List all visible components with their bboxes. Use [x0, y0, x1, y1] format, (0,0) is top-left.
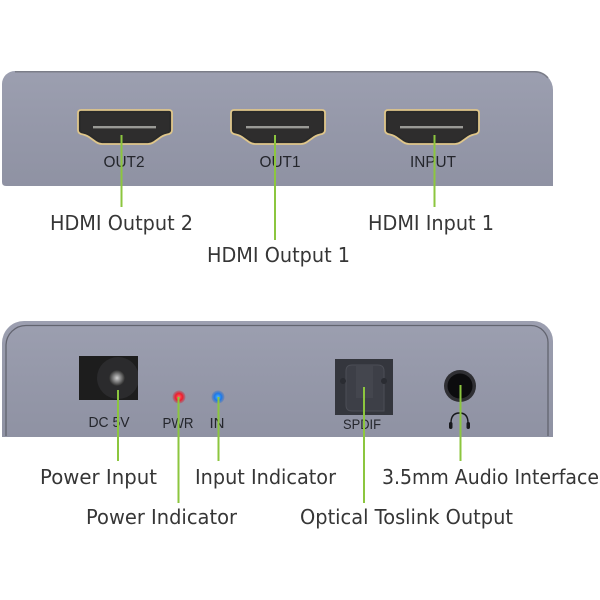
- text: OUT1: OUT1: [260, 154, 301, 171]
- icon: OUT2 HDMI port: [78, 110, 172, 144]
- text: SPDIF: SPDIF: [343, 416, 381, 432]
- label: HDMI Output 2: HDMI Output 2: [50, 211, 193, 235]
- label: Power Input: Power Input: [40, 465, 157, 489]
- icon: INPUT HDMI port: [385, 110, 479, 144]
- callout line: Optical Toslink Output: [363, 387, 365, 503]
- callout line: Input Indicator: [218, 397, 220, 461]
- text: DC 5V: DC 5V: [88, 414, 130, 431]
- callout line: Power Input: [117, 390, 119, 461]
- panel: rear of device with power and audio ports: [2, 321, 553, 437]
- callout line: Power Indicator: [178, 397, 180, 503]
- icon: optical SPDIF port: [335, 359, 393, 415]
- label: HDMI Output 1: HDMI Output 1: [207, 243, 350, 267]
- text: INPUT: INPUT: [410, 154, 456, 171]
- label: Input Indicator: Input Indicator: [195, 465, 337, 489]
- panel: front of device with HDMI ports: [2, 71, 553, 186]
- text: IN: IN: [210, 415, 224, 432]
- icon: DC power jack: [79, 356, 139, 400]
- icon: headphones symbol: [449, 413, 470, 429]
- label: Optical Toslink Output: Optical Toslink Output: [300, 505, 513, 529]
- icon: red power LED: [172, 390, 186, 404]
- icon: OUT1 HDMI port: [231, 110, 325, 144]
- text: PWR: PWR: [162, 415, 194, 432]
- callout line: HDMI Output 2: [120, 135, 122, 207]
- callout line: HDMI Input 1: [434, 135, 436, 207]
- icon: 3.5mm audio jack: [444, 370, 476, 402]
- callout line: HDMI Output 1: [274, 135, 276, 240]
- text: OUT2: OUT2: [104, 154, 145, 171]
- callout line: 3.5mm Audio Interface: [460, 385, 462, 461]
- icon: blue input LED: [212, 390, 224, 404]
- label: Power Indicator: Power Indicator: [86, 505, 238, 529]
- label: HDMI Input 1: HDMI Input 1: [368, 211, 494, 235]
